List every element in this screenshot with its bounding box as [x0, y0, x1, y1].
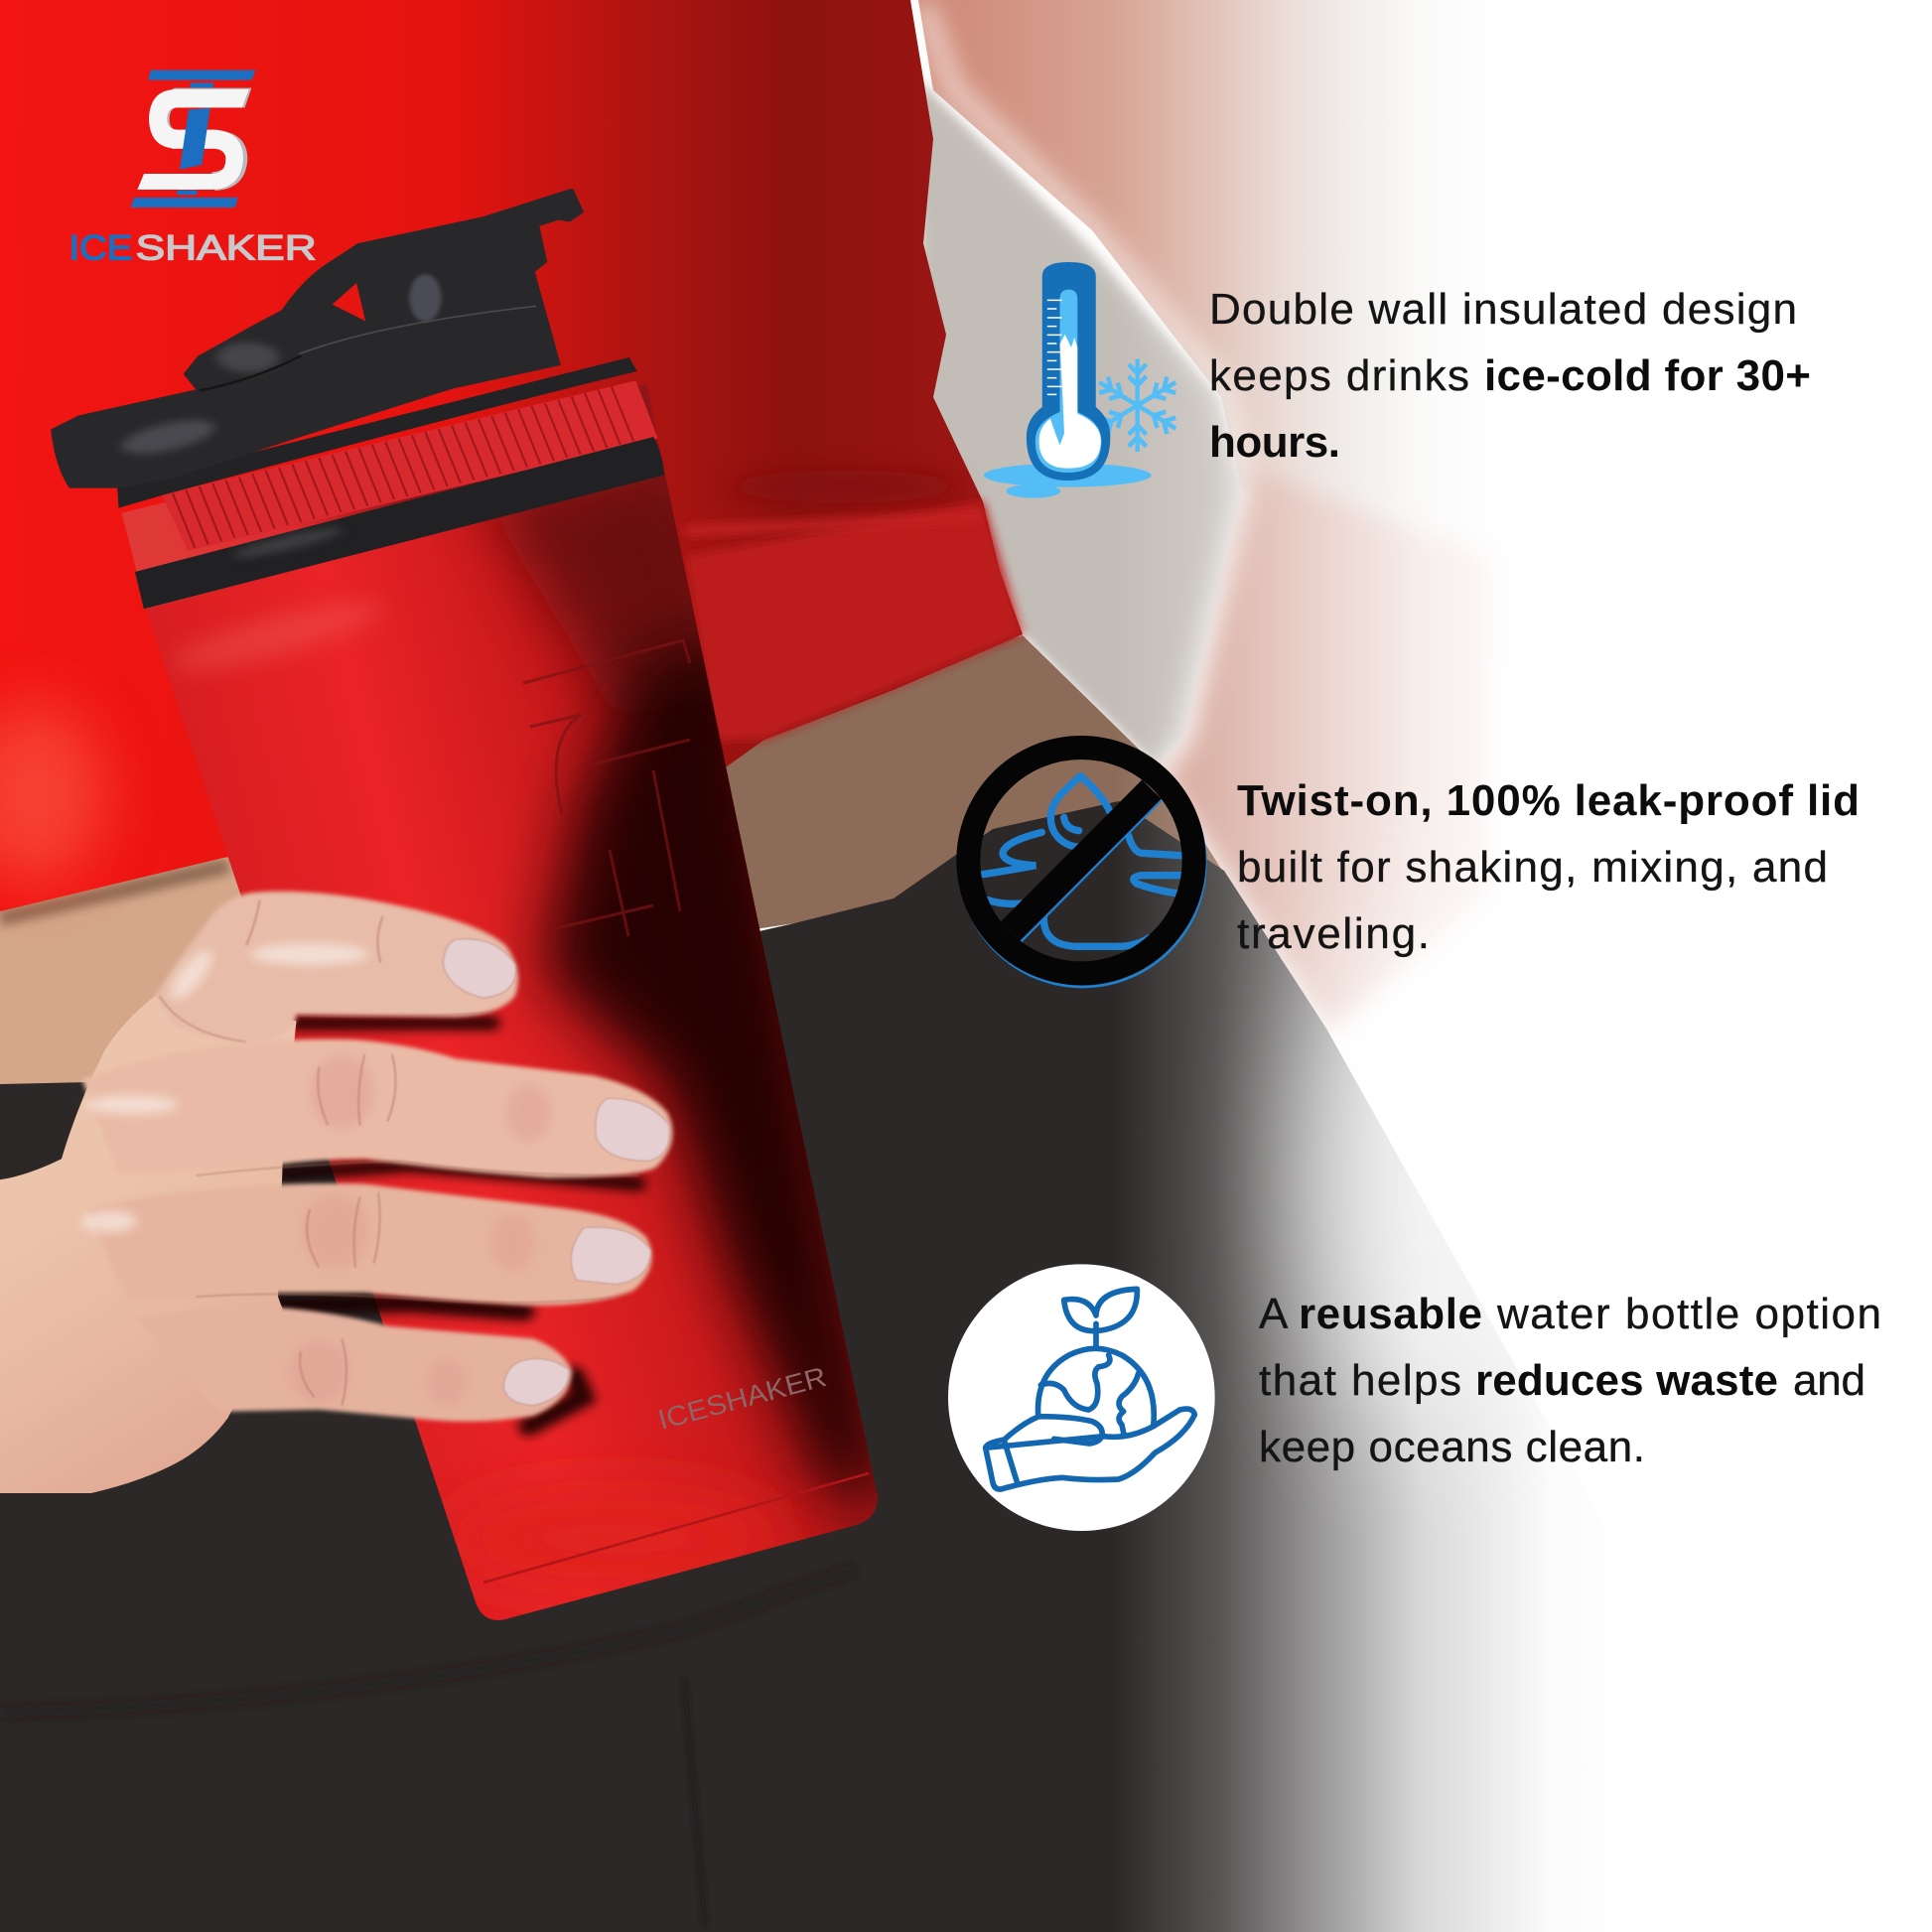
- lid rim and flip top: [53, 191, 582, 486]
- midriff left: [0, 844, 298, 1112]
- thermometer ice: [1039, 335, 1101, 469]
- black prohibition ring: [968, 748, 1194, 973]
- white circle: [948, 1264, 1215, 1531]
- text: reusable bottle: reusable: [1299, 1290, 1482, 1338]
- text: reusable bottle: A: [1259, 1290, 1289, 1338]
- fade on upper trousers: [1301, 933, 1539, 1430]
- shirt highlight: [0, 705, 104, 884]
- lid hole: [333, 283, 365, 321]
- thermometer tube: [1027, 262, 1110, 481]
- text: reusable bottle: keep oceans clean.: [1259, 1423, 1645, 1471]
- icon: earth in hand: [948, 1264, 1215, 1531]
- text: double wall insulated design: [1209, 285, 1811, 467]
- text: double wall insulated design: hours.: [1209, 418, 1340, 467]
- arm: [918, 0, 1549, 695]
- text: reusable bottle: [1259, 1290, 1881, 1471]
- skin highlights: [82, 943, 369, 1232]
- text: reusable bottle: that helps: [1259, 1356, 1461, 1405]
- text: reusable bottle: water bottle option: [1496, 1290, 1881, 1338]
- midriff right: [675, 635, 1224, 938]
- little finger: [137, 1308, 572, 1422]
- small wordmark on bottle: ICESHAKER: [655, 1361, 830, 1436]
- logo: [69, 70, 317, 267]
- trouser seams: [0, 1569, 854, 1713]
- text: leak-proof lid: [1237, 776, 1860, 958]
- text: double wall insulated design: keeps drinks: [1209, 351, 1469, 400]
- puddle: [984, 464, 1152, 498]
- ribbed collar: [122, 380, 664, 609]
- finger creases: [160, 996, 638, 1303]
- embossed logo: [523, 640, 690, 936]
- text: double wall insulated design: Double wall insulated design: [1209, 285, 1797, 334]
- lid base: [117, 357, 637, 508]
- text: reusable bottle: reduces waste: [1475, 1356, 1778, 1405]
- snowflake: [1095, 359, 1180, 452]
- text: reusable bottle: and: [1793, 1356, 1865, 1405]
- thermometer fill: [1035, 290, 1101, 473]
- palm and back of hand: [0, 996, 296, 1493]
- icon: no leak: [959, 741, 1205, 987]
- text: double wall insulated design: ice-cold for 30+: [1484, 351, 1811, 400]
- logo wordmark: SHAKER: [136, 228, 317, 267]
- logo wordmark: [69, 228, 317, 267]
- knuckles: [290, 1054, 552, 1406]
- bottle body: [139, 467, 887, 1628]
- black band: [135, 437, 664, 609]
- line art: [986, 1289, 1194, 1489]
- text: leak-proof lid: traveling.: [1237, 909, 1430, 958]
- leak drawing: [983, 776, 1181, 946]
- hand: [0, 892, 672, 1493]
- shirt fold: [685, 516, 983, 531]
- icon: thermometer with snowflake: [984, 262, 1180, 498]
- arm highlight: [923, 5, 1244, 774]
- lid and collar: [53, 191, 664, 609]
- logo mark: [131, 70, 256, 207]
- shadows between fingers: [283, 1023, 638, 1427]
- finger nails: [443, 939, 669, 1406]
- thermometer ticks: [1047, 300, 1061, 394]
- text: leak-proof lid: built for shaking, mixing, and: [1237, 843, 1828, 892]
- index finger: [155, 892, 518, 1041]
- lower skin: [1157, 467, 1489, 1033]
- window behind the arm: [918, 79, 1243, 766]
- text: leak-proof lid: Twist-on, 100% leak-proof lid: [1237, 776, 1860, 825]
- trousers: [0, 801, 1718, 1932]
- bottle: [53, 191, 887, 1628]
- blue ring: [959, 741, 1205, 987]
- black slash: [1010, 789, 1152, 931]
- knuckle lines: [246, 899, 395, 1406]
- shirt hem: [685, 501, 1023, 740]
- lid highlights: [116, 413, 220, 461]
- logo wordmark: ICE: [69, 228, 132, 267]
- midriff shadow: [0, 866, 228, 918]
- red shirt: [0, 0, 1023, 911]
- ring finger: [86, 1183, 652, 1306]
- fingers: [82, 892, 672, 1422]
- middle finger: [82, 1039, 672, 1177]
